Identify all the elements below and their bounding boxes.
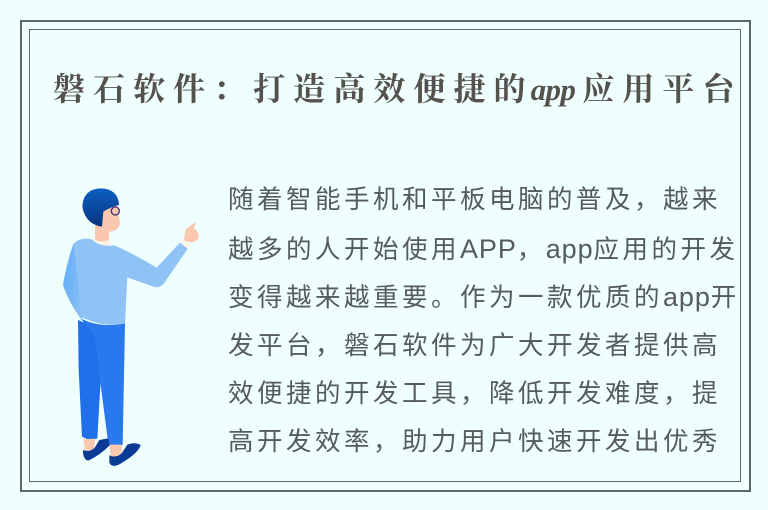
neck: [95, 225, 109, 242]
near leg: [81, 318, 125, 446]
cuff: [180, 239, 189, 249]
arm behind: [63, 242, 90, 320]
hair: [82, 188, 119, 227]
left shoe: [83, 438, 110, 461]
body text: [228, 186, 740, 456]
line 3: 变得越来越重要。作为一款优质的app开: [228, 282, 740, 312]
line 4: 发平台，磐石软件为广大开发者提供高: [228, 332, 721, 360]
hand: [184, 222, 199, 242]
line 1: 随着智能手机和平板电脑的普及，越来: [228, 186, 721, 214]
ankles: [83, 439, 122, 457]
line 5: 效便捷的开发工具，降低开发难度，提: [228, 380, 721, 408]
collar: [92, 238, 114, 246]
torso and pointing arm: [73, 239, 188, 325]
face: [100, 205, 120, 232]
line 6: 高开发效率，助力用户快速开发出优秀: [228, 428, 721, 456]
far leg: [78, 320, 102, 440]
right shoe: [109, 443, 141, 466]
title: 磐石软件：打造高效便捷的app应用平台: [53, 71, 743, 107]
line 2: 越多的人开始使用APP，app应用的开发: [228, 234, 739, 264]
glasses: [111, 207, 119, 215]
illustration: man pointing: [63, 188, 199, 466]
